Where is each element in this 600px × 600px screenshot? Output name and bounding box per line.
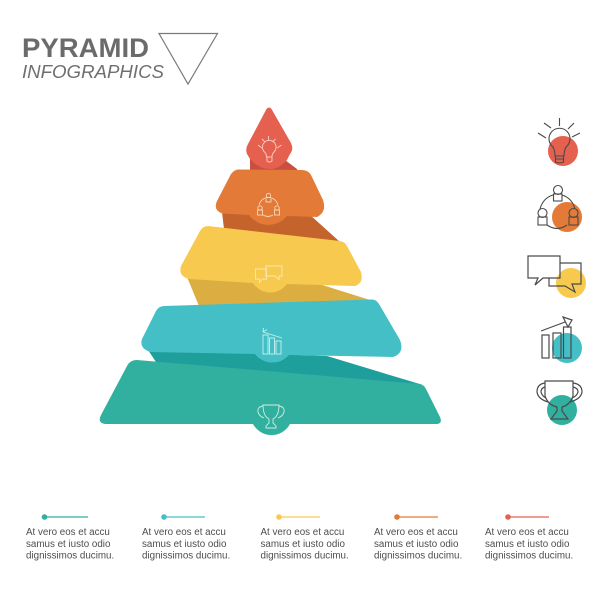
- caption 5: red: At vero eos et accu: [485, 527, 569, 538]
- caption 5: red: samus et iusto odio: [485, 539, 570, 550]
- caption 2: teal: samus et iusto odio: [142, 539, 227, 550]
- title: PYRAMID: [22, 33, 149, 63]
- tier 4: teal: [141, 299, 401, 363]
- pyramid: [100, 108, 441, 435]
- side icon: trophy: [537, 381, 582, 425]
- caption 3: yellow: At vero eos et accu: [260, 527, 344, 538]
- caption 5: red: [485, 514, 573, 562]
- caption 5: red: dignissimos ducimu.: [485, 550, 573, 562]
- tier 3: yellow: [180, 226, 362, 293]
- tier 5: green: [100, 360, 441, 435]
- caption 4: orange: samus et iusto odio: [374, 539, 459, 550]
- caption 3: yellow: dignissimos ducimu.: [260, 550, 349, 562]
- icon: bulb on red tier: [258, 136, 282, 162]
- tier 2: orange: [216, 170, 324, 225]
- caption 4: orange: [374, 514, 462, 562]
- caption 2: teal: dignissimos ducimu.: [142, 550, 230, 562]
- icon: chat on yellow tier: [256, 266, 282, 282]
- tier 1 shadow: [250, 150, 298, 172]
- caption 3: yellow: samus et iusto odio: [260, 539, 345, 550]
- caption 3: yellow: [260, 514, 349, 562]
- icon: trophy on green tier: [258, 405, 284, 428]
- tier 4 shadow: [148, 350, 423, 385]
- caption 1: green: samus et iusto odio: [26, 539, 111, 550]
- icon: people on orange tier: [258, 193, 280, 216]
- caption 4: orange: dignissimos ducimu.: [374, 550, 462, 562]
- caption 1: green: [26, 514, 114, 562]
- caption 2: teal: [142, 514, 230, 562]
- caption 1: green: dignissimos ducimu.: [26, 550, 114, 562]
- tier 1: red: [246, 108, 292, 169]
- side icon: bars: [541, 317, 582, 363]
- side icon: bulb: [538, 118, 580, 166]
- icon: bars on teal tier: [263, 328, 282, 354]
- title: INFOGRAPHICS: [22, 62, 164, 82]
- title: [22, 33, 164, 82]
- caption 2: teal: At vero eos et accu: [142, 527, 226, 538]
- side icon: people: [538, 186, 582, 232]
- tier 3 shadow: [187, 277, 370, 306]
- caption 4: orange: At vero eos et accu: [374, 527, 458, 538]
- icon: title triangle: [159, 34, 218, 84]
- tier 2 shadow: [222, 212, 340, 242]
- caption 1: green: At vero eos et accu: [26, 527, 110, 538]
- side icon: chat: [528, 256, 586, 298]
